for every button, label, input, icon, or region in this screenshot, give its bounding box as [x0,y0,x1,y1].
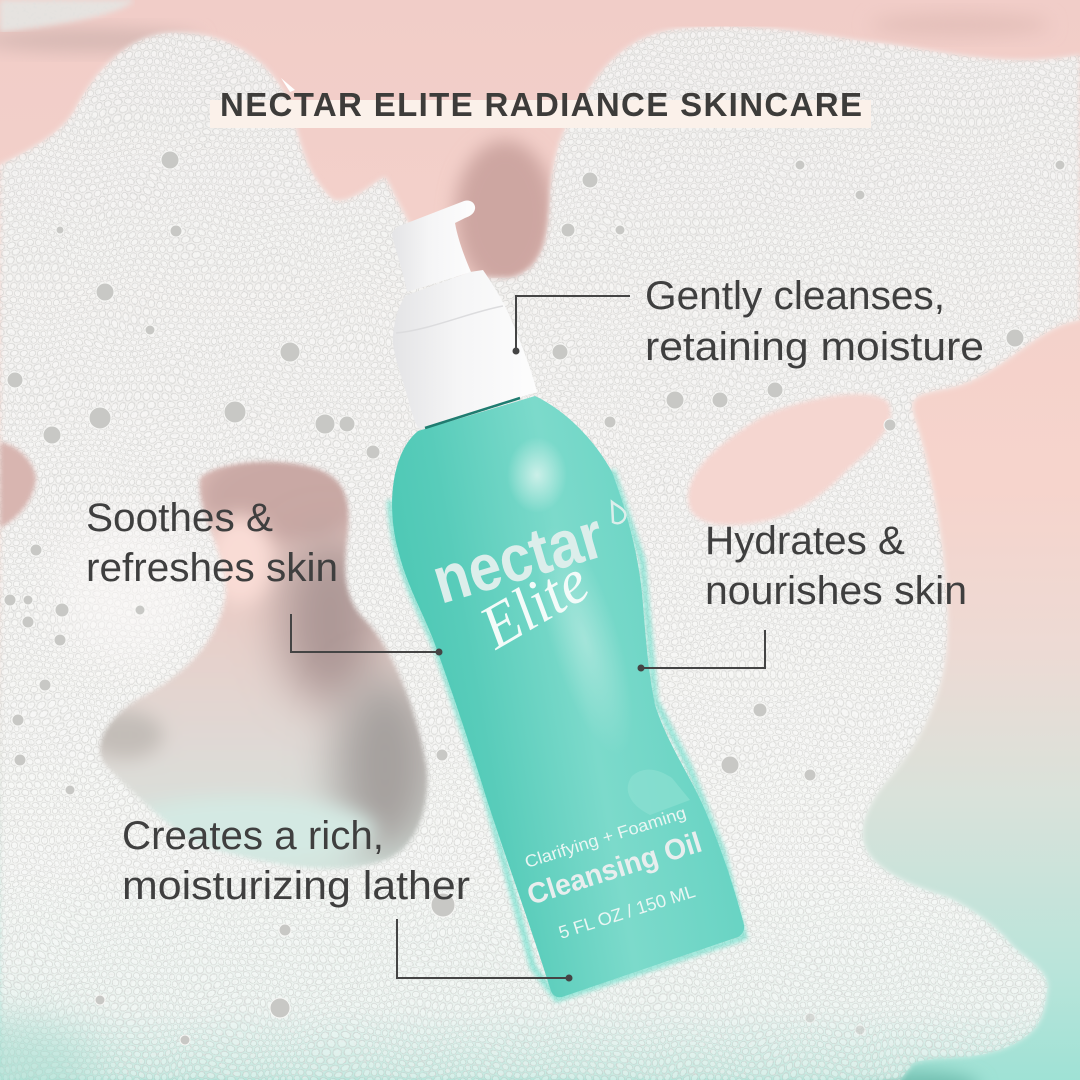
callout: soothes: refreshes skin [86,546,338,590]
callout: gently cleanses: Gently cleanses, [645,274,945,318]
foam holes: pink pools [0,394,891,528]
foam strip: top-left corner [0,0,135,32]
white patch: left foam [60,520,200,660]
pump head [392,201,475,292]
logo: Elite script: Elite [468,547,600,663]
callout: lather: moisturizing lather [122,864,470,908]
title band [210,100,871,128]
logo: droplet [612,502,625,523]
callout: hydrates: nourishes skin [705,569,967,613]
callout: gently cleanses [512,274,984,369]
title [210,78,871,128]
label: Cleansing Oil: Cleansing Oil [523,827,706,912]
bottle body [392,396,744,997]
callout: lather [122,814,572,982]
title text: NECTAR ELITE RADIANCE SKINCARE [220,86,862,123]
foam rim around bottle [390,470,744,999]
logo: nectar: nectar [424,497,612,617]
callout: gently cleanses: retaining moisture [645,325,984,369]
cap ridge [396,306,503,333]
white shard [281,78,295,92]
callout: hydrates [638,519,967,672]
callout: lather: Creates a rich, [122,814,384,858]
teal tint: bottom-left [0,1015,100,1080]
product: cleansing oil bottle [390,201,744,999]
callout: soothes [86,496,442,656]
label: Clarifying + Foaming: Clarifying + Foaming [522,803,688,872]
dark seam below cap [425,398,520,428]
callout: hydrates: Hydrates & [705,519,905,563]
pump collar and cap [393,270,537,429]
bottle highlights [507,437,690,815]
callout: soothes: Soothes & [86,496,273,540]
label: size: 5 FL OZ / 150 ML [556,881,698,943]
central-left pool with shading [98,459,430,870]
